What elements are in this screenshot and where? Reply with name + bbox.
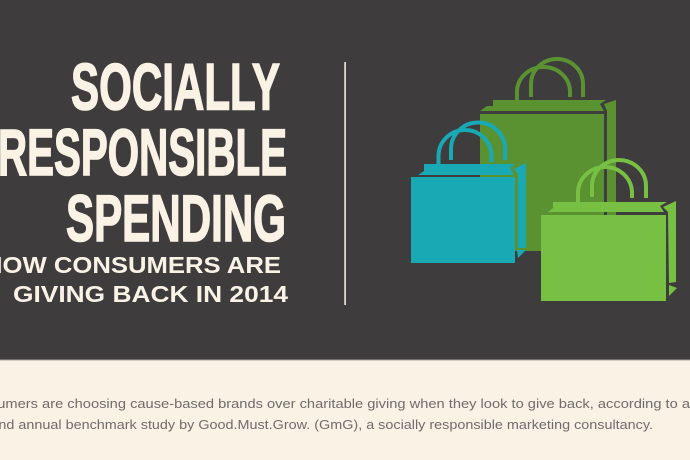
divider — [344, 62, 346, 305]
intro text — [0, 396, 690, 432]
title: SPENDING — [66, 181, 286, 255]
title: SOCIALLY — [71, 50, 280, 124]
panel: dark header — [0, 0, 690, 360]
subtitle: GIVING BACK IN 2014 — [13, 281, 288, 307]
title — [0, 50, 287, 255]
title: RESPONSIBLE — [0, 115, 287, 189]
icon: teal shopping bag — [411, 123, 526, 263]
icon: dark green shopping bag — [480, 59, 616, 251]
icon: light green shopping bag — [541, 160, 677, 301]
subtitle — [0, 252, 288, 307]
panel: cream intro — [0, 360, 690, 460]
header bottom edge — [0, 360, 690, 361]
